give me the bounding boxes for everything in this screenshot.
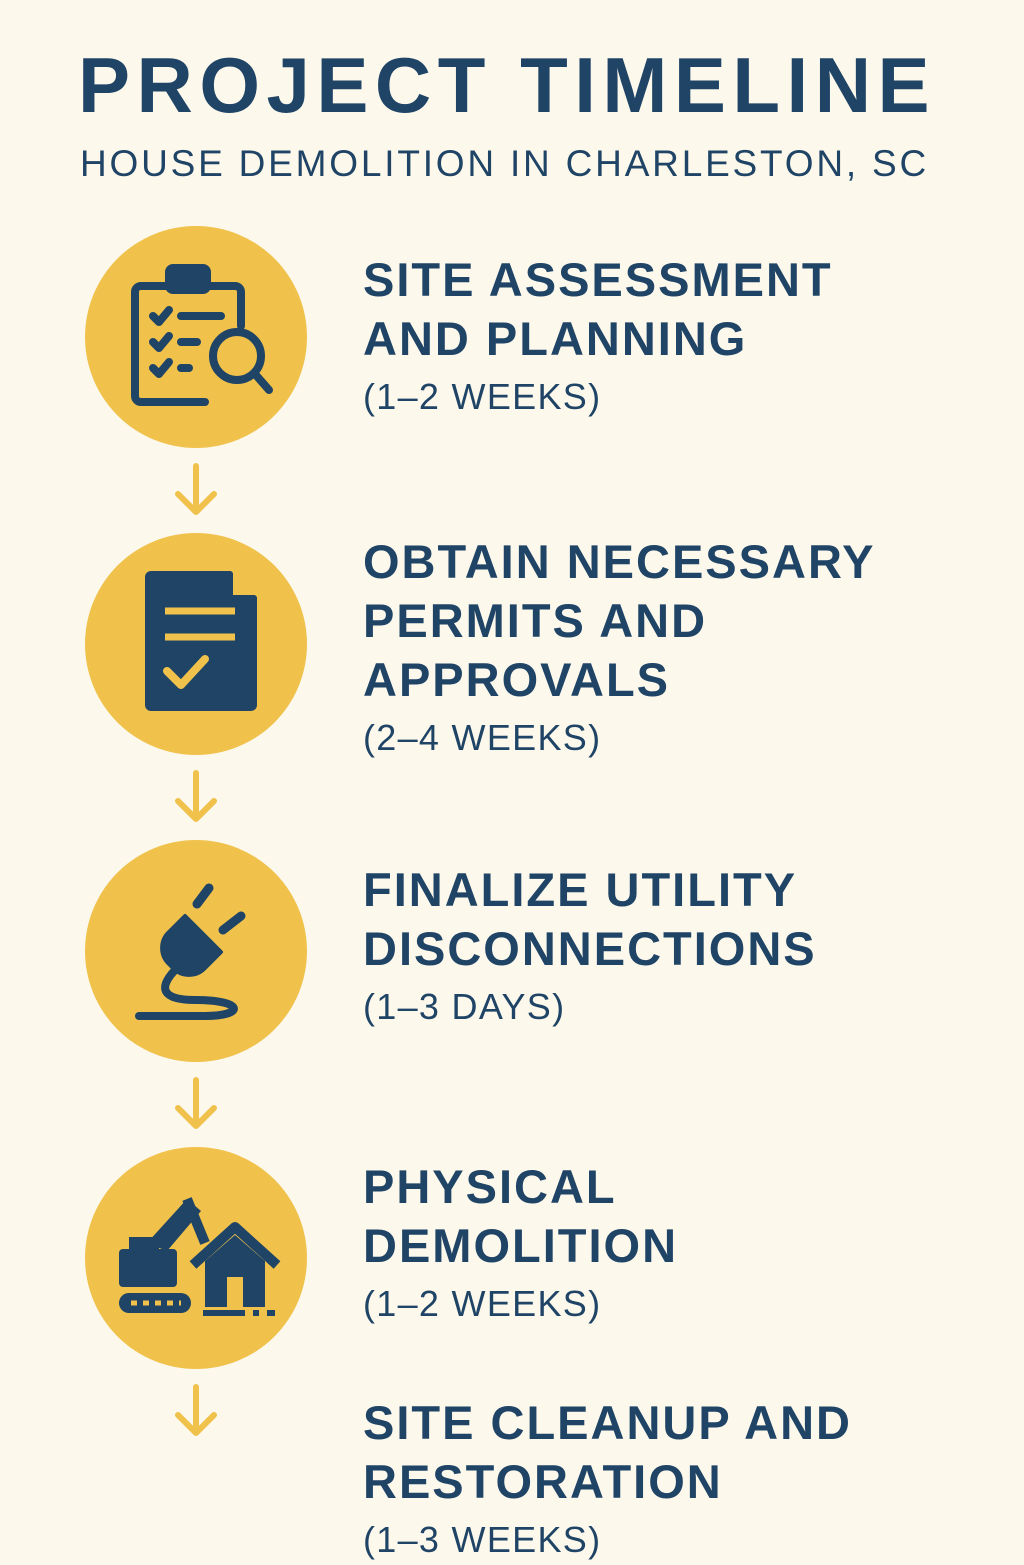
icon: clipboard with magnifier [85, 226, 307, 448]
step 3 text: DISCONNECTIONS [363, 922, 817, 975]
icon: document with check [85, 533, 307, 755]
step 5 text [363, 1396, 852, 1560]
step 2 text: (2–4 WEEKS) [363, 717, 601, 758]
step 2 text: PERMITS AND [363, 594, 707, 647]
arrow 3 [175, 1077, 217, 1129]
step 4 text: DEMOLITION [363, 1219, 678, 1272]
step 5 text: RESTORATION [363, 1455, 723, 1508]
step 5 text: SITE CLEANUP AND [363, 1396, 852, 1449]
arrow 4 [175, 1384, 217, 1436]
arrow 1 [175, 463, 217, 515]
step 2 text: OBTAIN NECESSARY [363, 535, 876, 588]
icon: plug [85, 840, 307, 1062]
step 1 text: (1–2 WEEKS) [363, 376, 601, 417]
step 5 text: (1–3 WEEKS) [363, 1519, 601, 1560]
step 4 text: (1–2 WEEKS) [363, 1283, 601, 1324]
step 1 text [363, 253, 833, 417]
subtitle: HOUSE DEMOLITION IN CHARLESTON, SC [80, 143, 929, 184]
step 4 text: PHYSICAL [363, 1160, 617, 1213]
step 2 text [363, 535, 876, 758]
icon: excavator and house [85, 1147, 307, 1369]
title: PROJECT TIMELINE [78, 41, 936, 129]
step 4 text [363, 1160, 678, 1324]
step 3 text: FINALIZE UTILITY [363, 863, 797, 916]
step 1 text: AND PLANNING [363, 312, 747, 365]
step 1 text: SITE ASSESSMENT [363, 253, 833, 306]
step 3 text: (1–3 DAYS) [363, 986, 565, 1027]
step 3 text [363, 863, 817, 1027]
step 2 text: APPROVALS [363, 653, 670, 706]
arrow 2 [175, 770, 217, 822]
